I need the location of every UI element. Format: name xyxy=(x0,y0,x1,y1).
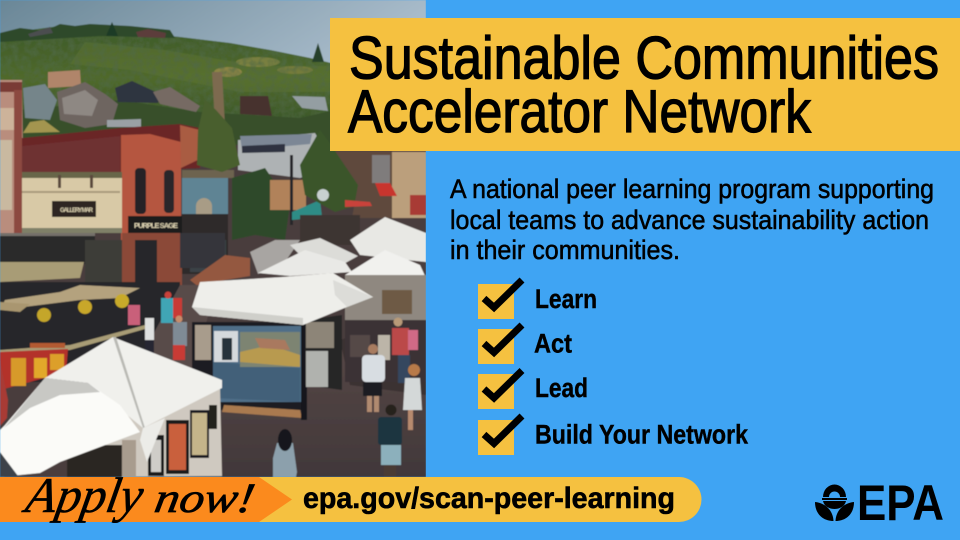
apply now script text: Apply xyxy=(19,467,148,523)
checklist xyxy=(478,280,749,455)
item: Lead: Lead xyxy=(535,373,588,403)
url pill: epa.gov/scan-peer-learning xyxy=(303,482,675,515)
item: Build Your Network: Build Your Network xyxy=(535,420,749,450)
item: Learn xyxy=(478,280,597,319)
apply now arrow xyxy=(0,477,292,522)
item: Build Your Network xyxy=(478,416,749,455)
street crowd near restaurant xyxy=(128,292,187,360)
EPA logo xyxy=(815,475,944,531)
item: Learn: Learn xyxy=(535,284,597,314)
description text: local teams to advance sustainability action xyxy=(450,205,929,235)
item: Lead xyxy=(478,370,588,409)
main white tent and art booth xyxy=(192,273,373,420)
shoppers on pavement xyxy=(273,344,422,477)
url pill xyxy=(240,477,702,522)
sign: Purple Sage xyxy=(128,216,182,233)
apply now script text xyxy=(19,467,260,523)
description text: in their communities. xyxy=(450,235,680,265)
crowd behind booth xyxy=(345,318,426,383)
title band xyxy=(330,18,960,151)
description text xyxy=(450,174,934,265)
item: Act: Act xyxy=(534,328,572,358)
title line 2: Accelerator Network xyxy=(348,78,812,145)
apply now script text: now! xyxy=(151,475,258,522)
icon: EPA flower xyxy=(815,484,854,521)
wordmark: EPA: EPA xyxy=(857,475,944,531)
sign: Purple Sage: PURPLE SAGE xyxy=(134,221,178,230)
item: Act xyxy=(478,325,572,364)
sign: Gallery Mar: GALLERY MAR xyxy=(60,208,94,214)
description text: A national peer learning program supporting xyxy=(450,174,934,204)
flag xyxy=(0,360,8,426)
front tent and art booth xyxy=(0,337,222,477)
photo: mountain town street art festival xyxy=(0,0,426,477)
back tents xyxy=(258,217,426,325)
sign: Gallery Mar xyxy=(52,201,96,217)
